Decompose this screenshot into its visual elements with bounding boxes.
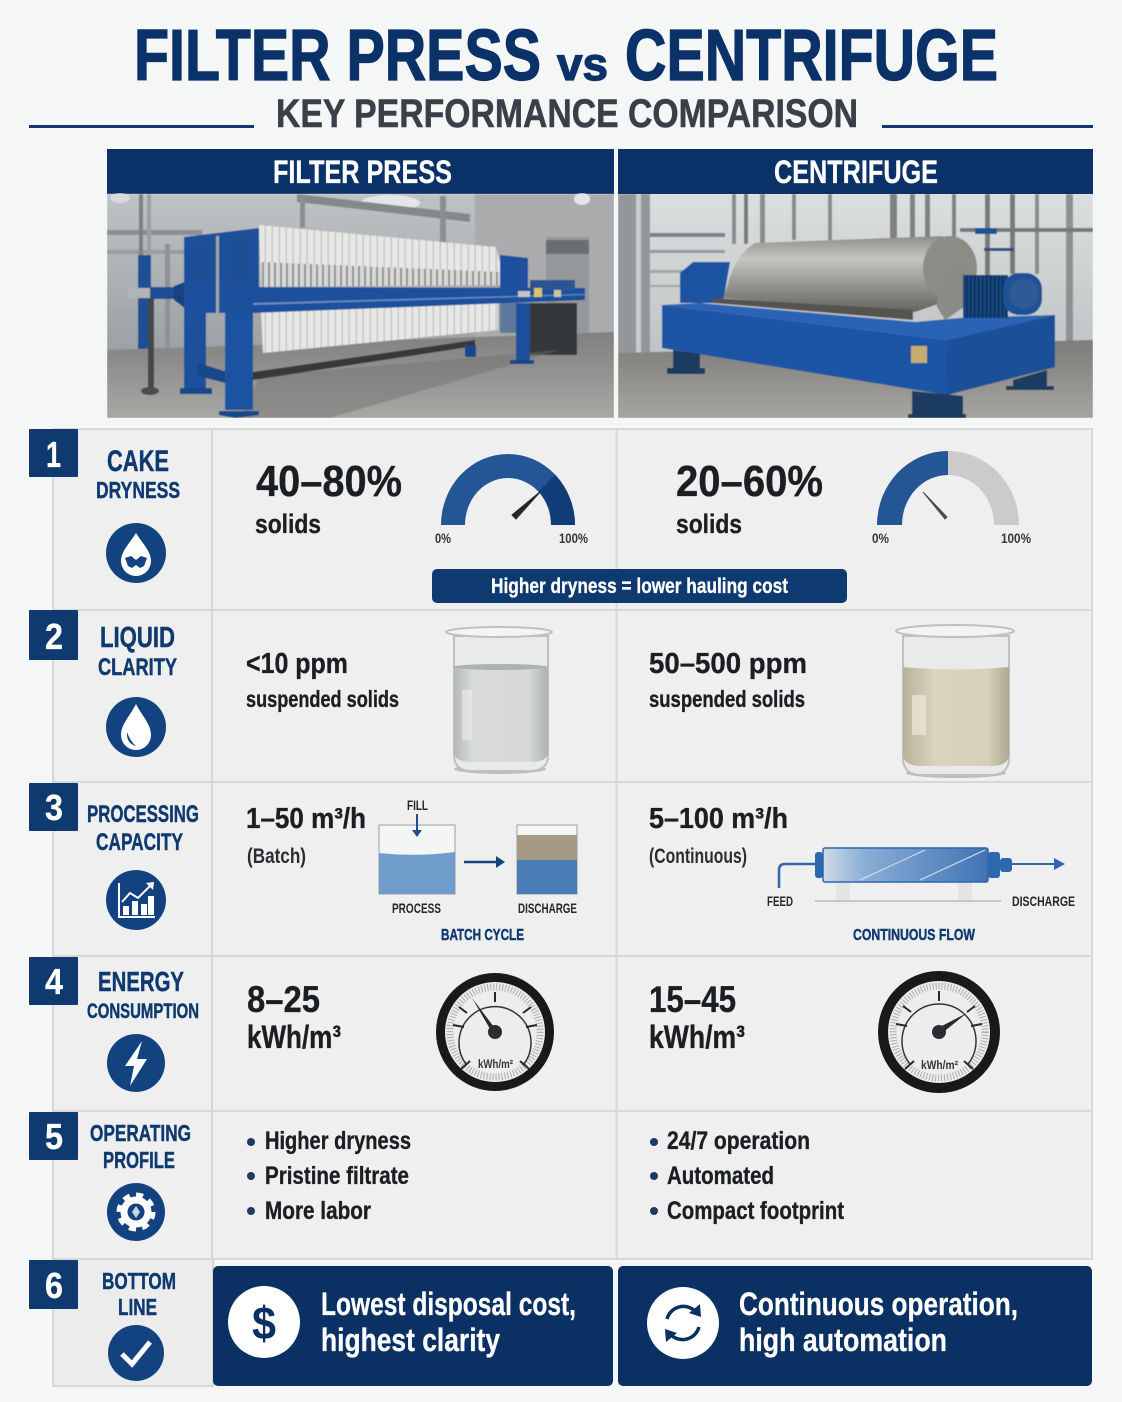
- bottom line: centrifuge: high automation: [739, 1322, 947, 1358]
- row 6: bottom line label: 6: [45, 1265, 63, 1306]
- title: [134, 16, 998, 96]
- row 5: centrifuge bullets: 24/7 operation: [667, 1127, 810, 1155]
- row 1: centrifuge value: 20–60%: [676, 457, 823, 506]
- callout: higher dryness: Higher dryness = lower hauling cost: [491, 575, 788, 598]
- row 4: filter press value: [247, 979, 341, 1055]
- diagram: continuous flow: [767, 848, 1075, 944]
- gauge: centrifuge dryness: [872, 451, 1031, 546]
- icon: water drop: [106, 697, 166, 757]
- row 1: cake dryness label: DRYNESS: [96, 477, 180, 503]
- row 6: bottom line label: BOTTOM: [102, 1268, 176, 1294]
- diagram: batch cycle: BATCH CYCLE: [441, 927, 524, 944]
- row 2: centrifuge value: [649, 648, 807, 712]
- row 2: filter press value: [246, 648, 399, 712]
- callout: higher dryness: [432, 569, 847, 603]
- row 4: filter press value: kWh/m³: [247, 1019, 341, 1055]
- row 5: operating profile label: OPERATING: [90, 1120, 191, 1146]
- diagram: continuous flow: CONTINUOUS FLOW: [853, 927, 976, 944]
- title: vs: [557, 38, 608, 90]
- row 2: liquid clarity label: 2: [45, 616, 63, 657]
- row 5: centrifuge bullets: [650, 1127, 845, 1225]
- row 3: processing capacity label: 3: [45, 787, 63, 828]
- column header: centrifuge: [618, 149, 1093, 194]
- dial: centrifuge energy: [878, 971, 1000, 1093]
- title: FILTER PRESS: [134, 16, 541, 96]
- beaker: murky centrate: [896, 625, 1014, 778]
- row 2: liquid clarity label: LIQUID: [100, 622, 175, 654]
- gauge: filter press dryness: 100%: [559, 530, 588, 546]
- column header: centrifuge: CENTRIFUGE: [774, 154, 938, 190]
- row 5: filter press bullets: Higher dryness: [265, 1127, 411, 1155]
- diagram: batch cycle: FILL: [407, 797, 428, 813]
- row 2: filter press value: <10 ppm: [246, 648, 348, 680]
- row 3: processing capacity label: [29, 783, 199, 930]
- column header: filter press: FILTER PRESS: [273, 154, 452, 190]
- row 4: centrifuge value: 15–45: [649, 979, 736, 1020]
- row 2: liquid clarity label: CLARITY: [98, 654, 177, 681]
- photo: centrifuge: [618, 194, 1093, 418]
- diagram: continuous flow: DISCHARGE: [1012, 893, 1075, 909]
- row 4: energy consumption label: ENERGY: [98, 966, 184, 997]
- row 5: centrifuge bullets: Compact footprint: [667, 1197, 845, 1225]
- row 2: filter press value: suspended solids: [246, 686, 399, 712]
- gauge: centrifuge dryness: 100%: [1001, 530, 1031, 546]
- row 3: filter press value: [246, 803, 366, 868]
- row 1: filter press value: solids: [255, 509, 321, 539]
- row 4: filter press value: 8–25: [247, 979, 320, 1020]
- dial: filter press energy: kWh/m²: [478, 1057, 513, 1071]
- row 4: energy consumption label: [29, 957, 199, 1092]
- comparison table frame: [53, 429, 1092, 1386]
- row 1: centrifuge value: solids: [676, 509, 742, 539]
- subtitle: KEY PERFORMANCE COMPARISON: [276, 92, 858, 136]
- gauge: filter press dryness: [435, 454, 588, 546]
- row 3: processing capacity label: CAPACITY: [96, 829, 183, 856]
- icon: gear: [107, 1183, 165, 1241]
- diagram: continuous flow: FEED: [767, 893, 793, 909]
- bottom line: filter press: Lowest disposal cost,: [321, 1286, 576, 1322]
- diagram: batch cycle: PROCESS: [392, 900, 441, 916]
- icon: cycle arrows: [647, 1287, 719, 1359]
- row 1: cake dryness label: 1: [46, 434, 61, 475]
- row 1: centrifuge value: [676, 457, 823, 539]
- beaker: clear filtrate: [446, 627, 552, 774]
- icon: growth chart: [106, 870, 166, 930]
- row 5: filter press bullets: More labor: [265, 1197, 371, 1225]
- row 1: filter press value: [255, 457, 402, 539]
- row 4: centrifuge value: kWh/m³: [649, 1019, 745, 1055]
- diagram: batch cycle: [379, 797, 577, 944]
- icon: check mark: [108, 1325, 164, 1381]
- gauge: centrifuge dryness: 0%: [872, 530, 889, 546]
- row 4: centrifuge value: [649, 979, 745, 1055]
- row 6: bottom line label: [29, 1260, 176, 1381]
- row 5: filter press bullets: Pristine filtrate: [265, 1162, 409, 1190]
- row 5: operating profile label: 5: [45, 1116, 63, 1157]
- row 5: operating profile label: PROFILE: [103, 1147, 175, 1173]
- bottom line: filter press: highest clarity: [321, 1322, 500, 1358]
- diagram: batch cycle: DISCHARGE: [518, 900, 577, 916]
- bottom line: centrifuge: [618, 1266, 1092, 1386]
- row 3: processing capacity label: PROCESSING: [87, 801, 199, 828]
- bottom line: centrifuge: Continuous operation,: [739, 1286, 1018, 1322]
- row 3: centrifuge value: [649, 803, 788, 868]
- gauge: filter press dryness: 0%: [435, 530, 451, 546]
- row 1: cake dryness label: [29, 429, 180, 583]
- photo: filter press: [107, 193, 614, 418]
- subtitle: [29, 92, 1093, 136]
- row 6: bottom line label: LINE: [118, 1294, 157, 1320]
- column header: filter press: [107, 149, 614, 194]
- row 5: filter press bullets: [247, 1127, 411, 1225]
- row 3: filter press value: 1–50 m³/h: [246, 803, 366, 835]
- row 3: filter press value: (Batch): [247, 845, 306, 868]
- row 2: centrifuge value: suspended solids: [649, 686, 805, 712]
- icon: dollar: [228, 1286, 300, 1358]
- dial: filter press energy: [436, 973, 554, 1091]
- row 4: energy consumption label: CONSUMPTION: [87, 1000, 199, 1023]
- bottom line: filter press: [213, 1266, 613, 1386]
- title: CENTRIFUGE: [625, 16, 998, 96]
- row 4: energy consumption label: 4: [45, 961, 63, 1002]
- icon: dollar: $: [252, 1297, 276, 1349]
- icon: cake drop: [106, 523, 166, 583]
- row 5: operating profile label: [29, 1112, 191, 1241]
- row 3: centrifuge value: (Continuous): [649, 845, 747, 868]
- dial: centrifuge energy: kWh/m²: [921, 1058, 958, 1072]
- icon: lightning bolt: [107, 1034, 165, 1092]
- row 2: centrifuge value: 50–500 ppm: [649, 648, 807, 680]
- row 2: liquid clarity label: [29, 610, 177, 757]
- row 5: centrifuge bullets: Automated: [667, 1162, 774, 1190]
- row 1: cake dryness label: CAKE: [107, 445, 169, 478]
- row 1: filter press value: 40–80%: [256, 457, 402, 506]
- row 3: centrifuge value: 5–100 m³/h: [649, 803, 788, 835]
